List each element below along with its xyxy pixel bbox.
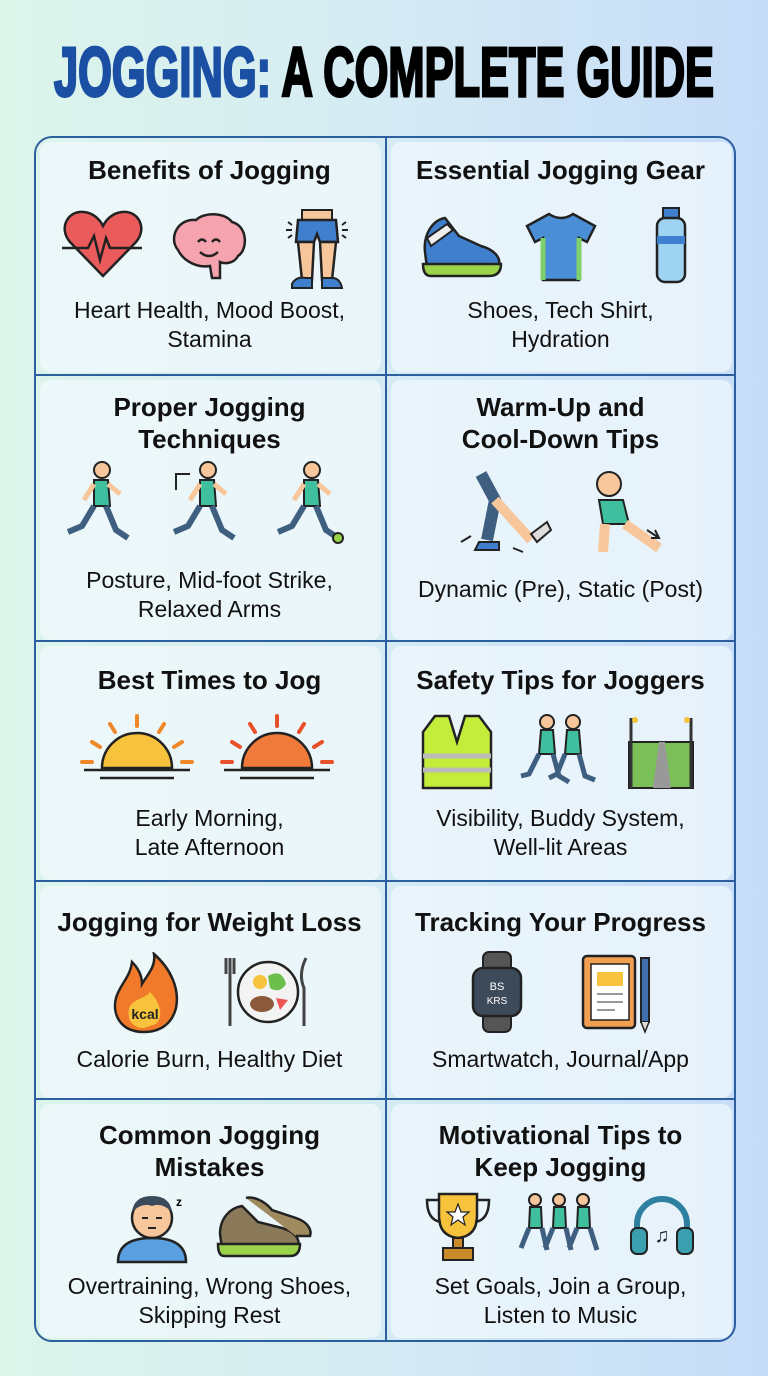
heading: tracking: Tracking Your Progress — [415, 907, 706, 937]
icon: runners — [66, 461, 344, 544]
icon: brain — [172, 213, 246, 280]
heading: mistakes: Common Jogging — [99, 1120, 320, 1150]
icon: worn shoes — [216, 1196, 312, 1258]
icon: sunset — [220, 714, 334, 780]
caption: safety: Well-lit Areas — [494, 834, 627, 860]
heading: motivation: Keep Jogging — [475, 1152, 646, 1182]
icon: tired person: z — [176, 1195, 182, 1209]
icon: smartwatch — [472, 951, 522, 1033]
panel: warm-up — [418, 392, 703, 602]
icon: smartwatch: KRS — [487, 996, 508, 1007]
caption: benefits: Stamina — [167, 326, 252, 352]
panel: motivation — [426, 1120, 694, 1328]
heading: benefits: Benefits of Jogging — [88, 155, 331, 185]
caption: motivation — [385, 1272, 736, 1330]
icon: buddies — [520, 714, 596, 784]
icon: flame — [114, 952, 178, 1034]
caption: gear: Shoes, Tech Shirt, — [467, 297, 654, 323]
heading: motivation — [385, 1119, 736, 1183]
heading: safety: Safety Tips for Joggers — [416, 665, 705, 695]
panel: mistakes — [68, 1120, 351, 1328]
caption: mistakes: Skipping Rest — [139, 1302, 280, 1328]
panel: best times — [80, 665, 334, 860]
caption: techniques: Posture, Mid-foot Strike, — [86, 567, 333, 593]
icon: stretch — [596, 471, 662, 552]
icon: smartwatch: BS — [490, 981, 504, 993]
heading: motivation: Motivational Tips to — [439, 1120, 682, 1150]
heading: techniques — [113, 392, 306, 454]
caption: warm-up: Dynamic (Pre), Static (Post) — [418, 576, 703, 602]
icon: group runners — [515, 1192, 607, 1264]
icon: journal — [582, 954, 650, 1034]
caption: techniques — [86, 567, 333, 622]
icon: lit path — [628, 717, 694, 789]
caption: safety — [436, 805, 685, 860]
icon: shoe — [422, 216, 502, 278]
caption: best times — [135, 805, 284, 860]
caption: motivation: Set Goals, Join a Group, — [435, 1273, 686, 1299]
caption: gear: Hydration — [511, 326, 610, 352]
heading: best times: Best Times to Jog — [98, 665, 321, 695]
icon: shirt — [525, 212, 597, 282]
heading: warm-up: Cool-Down Tips — [462, 424, 659, 454]
caption: mistakes: Overtraining, Wrong Shoes, — [68, 1273, 351, 1299]
caption: techniques: Relaxed Arms — [138, 596, 281, 622]
heading: gear: Essential Jogging Gear — [416, 155, 705, 185]
icon: vest — [422, 714, 492, 790]
caption: best times: Late Afternoon — [135, 834, 284, 860]
heading: weight loss: Jogging for Weight Loss — [57, 907, 362, 937]
heading: techniques: Techniques — [138, 424, 281, 454]
icon: legs — [286, 209, 348, 289]
panel: weight loss — [57, 907, 362, 1072]
heading: mistakes — [99, 1120, 320, 1182]
icon: headphones — [629, 1192, 695, 1258]
caption: benefits — [74, 297, 345, 352]
caption: mistakes — [68, 1273, 351, 1328]
heading: mistakes: Mistakes — [155, 1152, 264, 1182]
panel: gear — [416, 155, 705, 352]
panel: techniques — [66, 392, 344, 622]
icon: headphones: ♫ — [654, 1225, 670, 1247]
icon: plate — [224, 957, 308, 1026]
caption: weight loss: Calorie Burn, Healthy Diet — [77, 1046, 342, 1072]
panel: safety — [416, 665, 705, 860]
heading: techniques: Proper Jogging — [113, 392, 306, 422]
heading: warm-up — [462, 392, 659, 454]
icon: heart — [62, 210, 143, 278]
panel: tracking — [415, 907, 706, 1072]
icon: flame: kcal — [131, 1006, 159, 1022]
icon: tired person — [116, 1195, 188, 1264]
icon: leg swing — [460, 471, 552, 553]
caption: tracking: Smartwatch, Journal/App — [432, 1046, 689, 1072]
caption: safety: Visibility, Buddy System, — [436, 805, 685, 831]
caption: benefits: Heart Health, Mood Boost, — [74, 297, 345, 323]
caption: motivation: Listen to Music — [484, 1302, 637, 1328]
heading: warm-up: Warm-Up and — [476, 392, 645, 422]
icon: sunrise — [80, 714, 194, 780]
caption: best times: Early Morning, — [135, 805, 284, 831]
caption: gear — [467, 297, 654, 352]
panel: benefits — [62, 155, 348, 352]
icon: trophy — [423, 1190, 493, 1264]
icon: bottle — [656, 207, 686, 284]
